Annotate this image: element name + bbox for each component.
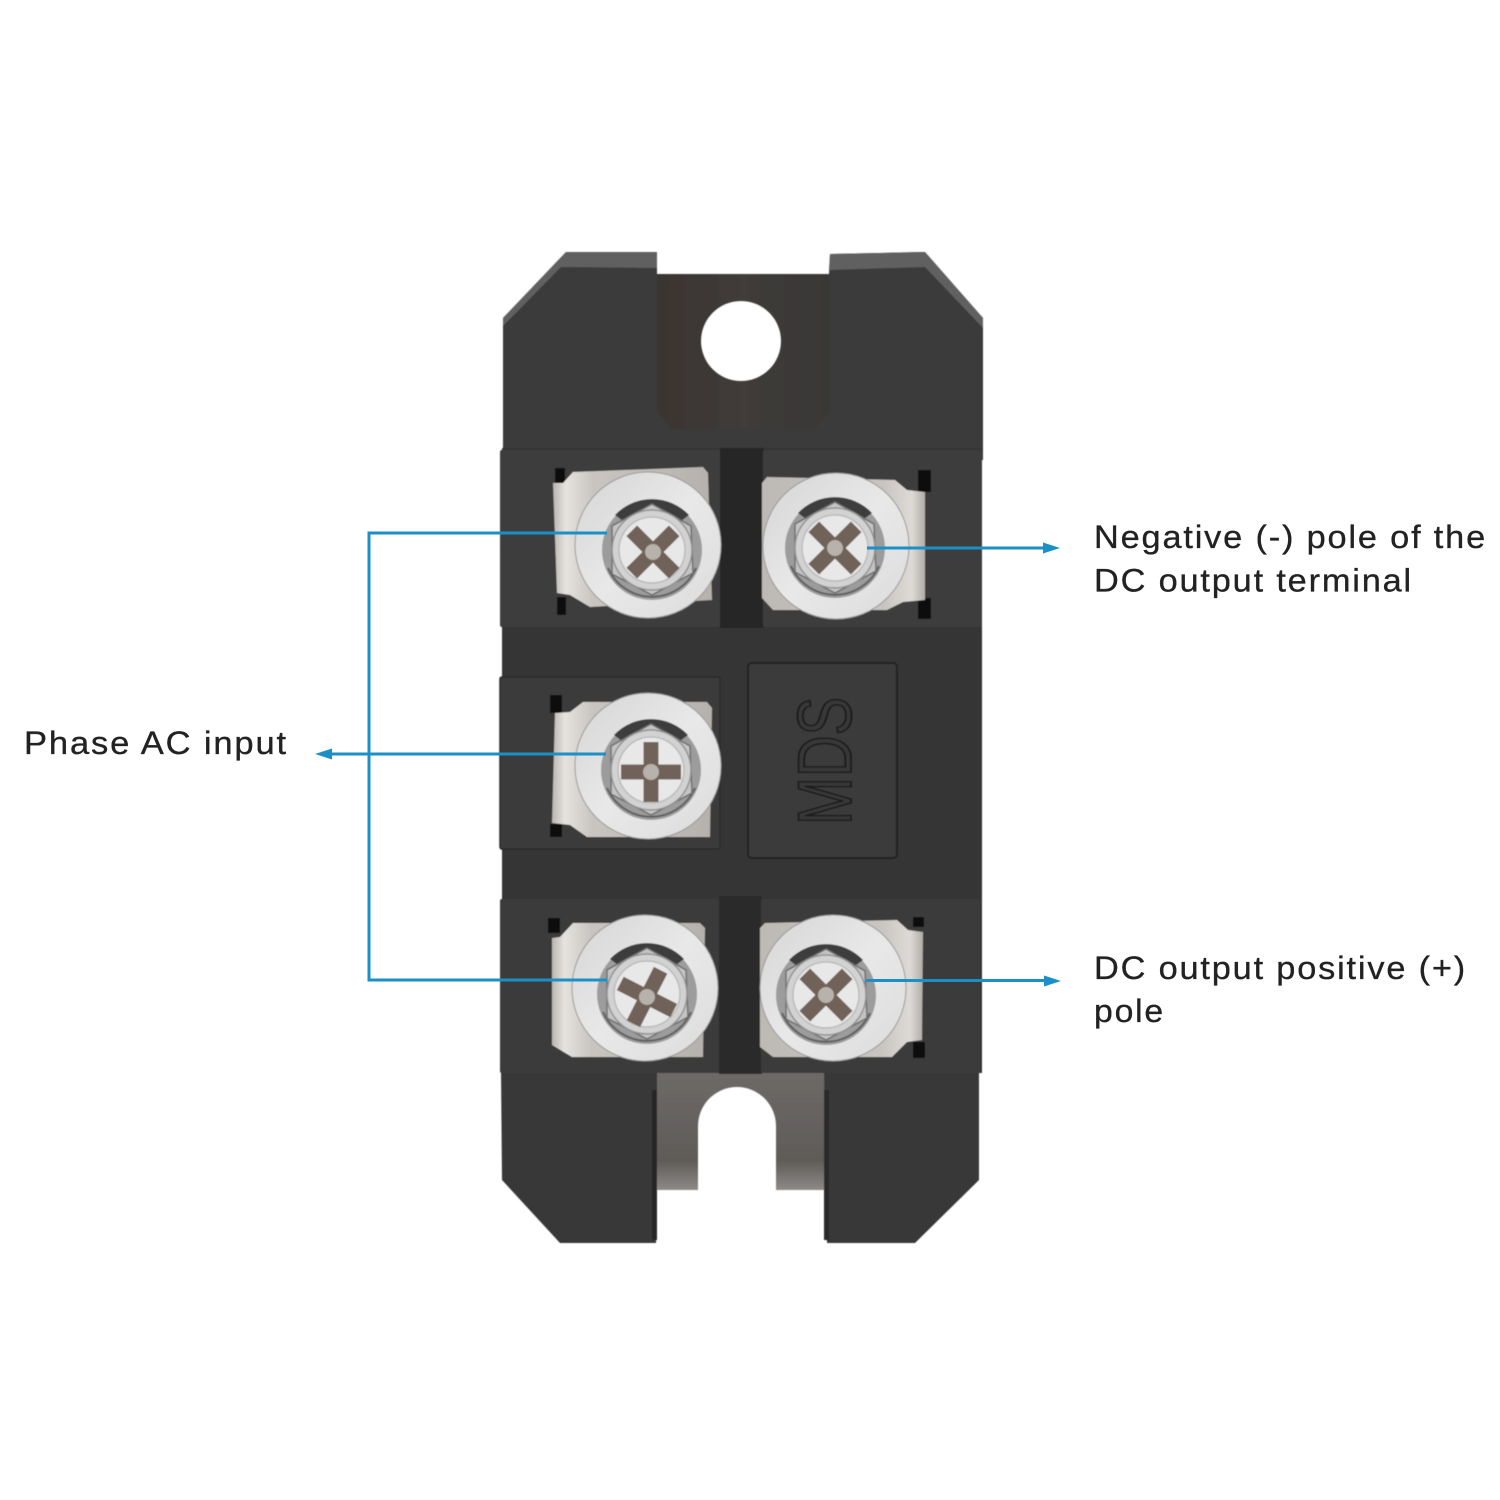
MDS label plate xyxy=(748,663,897,858)
label: negative pole: Negative (-) pole of the xyxy=(1094,519,1487,555)
centre slot xyxy=(720,448,764,628)
callout lines: Phase AC input xyxy=(315,532,607,982)
terminal block middle left xyxy=(500,677,720,849)
label: negative pole xyxy=(1094,519,1487,598)
terminal block bottom left xyxy=(500,899,719,1073)
label: negative pole: DC output terminal xyxy=(1094,562,1413,598)
label: positive pole xyxy=(1094,950,1467,1029)
module body lower right xyxy=(824,1072,979,1243)
label: positive pole: pole xyxy=(1094,993,1165,1029)
label: positive pole: DC output positive (+) xyxy=(1094,950,1467,986)
label: Phase AC input: Phase AC input xyxy=(24,725,288,761)
terminal block bottom right xyxy=(761,899,980,1073)
terminal block top right xyxy=(763,450,982,627)
arrow: left to Phase AC input xyxy=(315,748,332,760)
rectifier module xyxy=(500,252,983,1243)
top metal mounting tab with hole xyxy=(655,274,832,440)
terminal bottom left xyxy=(548,915,718,1061)
module body upper right xyxy=(740,252,983,460)
lower centre slot xyxy=(719,896,762,1074)
terminal bottom right xyxy=(760,915,925,1061)
terminal block top left xyxy=(500,450,720,627)
terminal top right xyxy=(762,470,931,619)
terminal middle left xyxy=(550,693,721,839)
bottom metal mounting tab with slot xyxy=(655,1072,826,1190)
module body lower left xyxy=(501,1072,657,1243)
module body centre xyxy=(502,448,982,1073)
terminal top left xyxy=(553,467,721,618)
MDS lettering: MDS xyxy=(783,697,868,825)
callout arrow: negative pole xyxy=(867,542,1060,554)
callout arrow: positive pole xyxy=(866,976,1061,986)
module body upper left xyxy=(503,252,745,460)
tab side shadows xyxy=(652,1090,829,1240)
